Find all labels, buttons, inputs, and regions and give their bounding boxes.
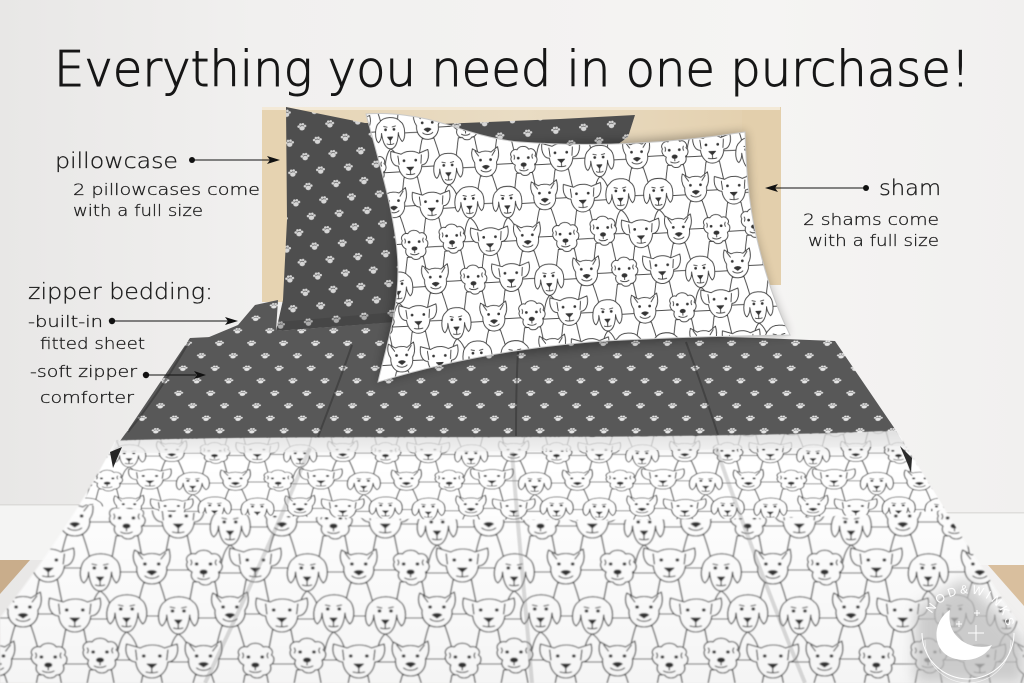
grey paw print pillowcase bbox=[276, 107, 635, 331]
arrow: built-in fitted sheet bbox=[109, 317, 238, 325]
logo: Nod and Winks moon badge: NOD&WINKS bbox=[926, 585, 1014, 626]
arrow: soft zipper comforter bbox=[143, 371, 206, 379]
dog print pillow sham bbox=[366, 113, 790, 382]
label: zipper bedding: comforter bbox=[40, 388, 134, 407]
quilt seams bbox=[128, 340, 718, 437]
comforter fold band bbox=[112, 431, 905, 453]
label: sham: with a full size bbox=[808, 231, 939, 250]
arrow: pillowcase bbox=[189, 156, 280, 164]
baseboard and floor bbox=[0, 504, 1024, 606]
label: sham bbox=[803, 176, 941, 250]
title: Everything you need in one purchase! bbox=[54, 41, 970, 98]
label: pillowcase: 2 pillowcases come bbox=[73, 180, 260, 199]
label: zipper bedding: fitted sheet bbox=[40, 334, 145, 353]
logo: Nod and Winks moon badge bbox=[909, 575, 1024, 683]
fitted sheet below pillow bbox=[190, 300, 395, 345]
label: pillowcase: with a full size bbox=[73, 201, 203, 220]
label: zipper bedding: zipper bedding: bbox=[28, 280, 213, 305]
label: zipper bedding: -soft zipper bbox=[30, 362, 138, 381]
dog print comforter bbox=[0, 431, 1024, 683]
label: zipper bedding bbox=[28, 280, 213, 407]
headboard bbox=[262, 107, 781, 302]
label: sham: 2 shams come bbox=[803, 210, 939, 229]
grey paw print comforter top bbox=[112, 328, 903, 452]
label: sham: sham bbox=[879, 176, 941, 200]
label: zipper bedding: -built-in bbox=[28, 312, 103, 331]
label: pillowcase bbox=[55, 149, 260, 220]
label: pillowcase: pillowcase bbox=[55, 149, 178, 173]
arrow: sham bbox=[765, 184, 869, 192]
comforter quilt seams bbox=[205, 448, 805, 683]
